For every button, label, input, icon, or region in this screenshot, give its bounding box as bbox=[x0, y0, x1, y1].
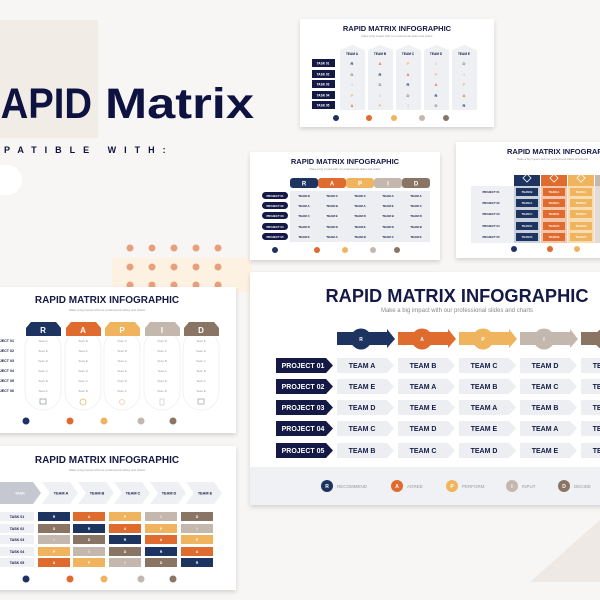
panel: slide 2 project matrix: PROJECT 03 bbox=[266, 214, 284, 218]
legend: INPUT bbox=[522, 484, 536, 489]
panel: slide 1 task matrix: D bbox=[351, 72, 354, 77]
panel: slide 2 project matrix: TEAM D bbox=[382, 225, 395, 229]
panel: slide 5 task grid: P bbox=[53, 550, 56, 554]
panel: slide 1 task matrix: TASK 05 bbox=[317, 104, 330, 108]
panel: slide 5 task grid: TASK bbox=[15, 492, 25, 496]
panel: slide 1 task matrix: RAPID MATRIX INFOGRAPHIC bbox=[343, 24, 452, 33]
panel: slide 4 RAPID columns: Team C bbox=[117, 339, 127, 343]
panel: slide 4 RAPID columns: Team E bbox=[157, 379, 167, 383]
panel: slide 4 RAPID columns: A bbox=[80, 326, 86, 335]
panel: slide 2 project matrix: TEAM A bbox=[298, 204, 311, 208]
panel: slide 2 project matrix: TEAM B bbox=[410, 225, 423, 229]
panel: slide 5 task grid: P bbox=[88, 561, 91, 565]
panel: slide 2 project matrix: TEAM D bbox=[298, 225, 311, 229]
panel: main slide: Make a big impact with our professional slides and charts bbox=[381, 308, 533, 314]
panel: main slide: TEAM C bbox=[471, 363, 497, 370]
panel: slide 1 task matrix: I bbox=[351, 82, 353, 87]
panel: slide 1 task matrix: R bbox=[463, 103, 466, 108]
panel: slide 5 task grid: R bbox=[160, 550, 163, 554]
legend: D bbox=[562, 484, 566, 490]
panel: slide 4 RAPID columns: Team B bbox=[78, 339, 88, 343]
panel: slide 3 project columns: TEAM D bbox=[576, 235, 586, 239]
panel: slide 3 project columns: TEAM A bbox=[522, 201, 532, 205]
panel: slide 5 task grid: R bbox=[88, 527, 91, 531]
panel: slide 4 RAPID columns: I bbox=[161, 326, 163, 335]
panel: slide 5 task grid: D bbox=[160, 561, 163, 565]
panel: slide 4 RAPID columns: RAPID MATRIX INFOGRAPHIC bbox=[35, 295, 179, 306]
panel: slide 1 task matrix: P bbox=[351, 93, 354, 98]
panel: slide 5 task grid: A bbox=[160, 538, 163, 542]
panel: slide 4 RAPID columns: Team D bbox=[157, 389, 167, 393]
legend bbox=[321, 480, 591, 492]
panel: slide 5 task grid: TEAM A bbox=[54, 492, 68, 496]
panel: slide 4 RAPID columns: Team B bbox=[196, 369, 206, 373]
main title: RAPID MATRIX INFOGRAPHIC bbox=[326, 286, 588, 306]
legend: RECOMMEND bbox=[337, 484, 368, 489]
panel: main slide: PROJECT 01 bbox=[282, 363, 325, 370]
panel: slide 5 task grid: TASK 03 bbox=[10, 538, 24, 542]
panel: main slide: TEAM B bbox=[471, 384, 497, 391]
panel: slide 1 task matrix: I bbox=[463, 72, 465, 77]
panel: slide 4 RAPID columns: Team A bbox=[38, 339, 48, 343]
panel: slide 1 task matrix: P bbox=[407, 61, 410, 66]
panel: main slide: TEAM C bbox=[349, 426, 375, 433]
legend: P bbox=[450, 484, 454, 490]
panel: main slide: PROJECT 02 bbox=[282, 384, 325, 391]
panel: slide 2 project matrix: TEAM E bbox=[382, 204, 394, 208]
panel: slide 2 project matrix: TEAM E bbox=[326, 214, 338, 218]
panel: main slide: TEAM A bbox=[410, 384, 436, 391]
panel: slide 1 task matrix: TEAM C bbox=[402, 52, 415, 56]
panel: slide 2 project matrix: TEAM C bbox=[382, 235, 395, 239]
panel: slide 1 task matrix: A bbox=[463, 93, 466, 98]
panel: slide 1 task matrix: TASK 03 bbox=[317, 82, 330, 86]
panel: slide 2 project matrix: TEAM E bbox=[410, 235, 422, 239]
panel: slide 1 task matrix: P bbox=[463, 82, 466, 87]
panel: slide 5 task grid: TEAM D bbox=[162, 492, 177, 496]
legend: I bbox=[511, 484, 513, 490]
panel: slide 1 task matrix: R bbox=[379, 72, 382, 77]
panel: slide 3 project columns: PROJECT 04 bbox=[482, 224, 500, 228]
panel: slide 2 project matrix: TEAM B bbox=[326, 204, 339, 208]
panel: slide 1 task matrix: A bbox=[351, 103, 354, 108]
panel: slide 1 task matrix: TEAM E bbox=[458, 52, 470, 56]
panel: slide 2 project matrix: I bbox=[387, 182, 389, 188]
panel: slide 2 project matrix: P bbox=[358, 182, 362, 188]
panel: slide 5 task grid: I bbox=[161, 515, 162, 519]
panel: slide 2 project matrix: PROJECT 01 bbox=[266, 194, 284, 198]
panel: slide 3 project columns: TEAM A bbox=[549, 190, 559, 194]
panel: slide 4 RAPID columns: Team B bbox=[78, 389, 88, 393]
panel: slide 2 project matrix: TEAM A bbox=[382, 194, 395, 198]
panel: slide 3 project columns: TEAM B bbox=[549, 235, 559, 239]
panel: slide 2 project matrix bbox=[250, 152, 440, 260]
panel: slide 3 project columns: TEAM C bbox=[576, 190, 586, 194]
panel: slide 5 task grid: R bbox=[53, 515, 56, 519]
panel: main slide: TEAM B bbox=[532, 405, 558, 412]
panel: slide 5 task grid: D bbox=[88, 538, 91, 542]
panel: slide 5 task grid: I bbox=[197, 527, 198, 531]
panel: slide 2 project matrix: TEAM E bbox=[354, 225, 366, 229]
panel: slide 2 project matrix: TEAM E bbox=[298, 235, 310, 239]
panel: slide 3 project columns: TEAM B bbox=[522, 190, 532, 194]
panel: slide 4 RAPID columns: Team A bbox=[157, 369, 167, 373]
panel: slide 1 task matrix: I bbox=[407, 103, 409, 108]
panel: slide 4 RAPID columns: Team A bbox=[196, 379, 206, 383]
panel: slide 2 project matrix: TEAM A bbox=[326, 235, 339, 239]
panel: slide 1 task matrix: A bbox=[379, 61, 382, 66]
panel: slide 2 project matrix: RAPID MATRIX INFOGRAPHIC bbox=[291, 157, 400, 166]
panel: slide 1 task matrix: TEAM B bbox=[374, 52, 387, 56]
panel: slide 4 RAPID columns: Team C bbox=[196, 359, 206, 363]
panel: slide 4 RAPID columns: Team C bbox=[78, 379, 88, 383]
team cells bbox=[337, 358, 600, 458]
panel: slide 2 project matrix: PROJECT 05 bbox=[266, 235, 284, 239]
panel: slide 4 RAPID columns: Team D bbox=[78, 369, 88, 373]
panel: slide 1 task matrix: A bbox=[407, 72, 410, 77]
panel: slide 4 RAPID columns: Team C bbox=[38, 369, 48, 373]
panel: slide 5 task grid: TASK 04 bbox=[10, 550, 24, 554]
panel: slide 5 task grid: TASK 01 bbox=[10, 515, 24, 519]
panel: slide 2 project matrix: TEAM B bbox=[354, 235, 367, 239]
panel: main slide: PROJECT 05 bbox=[282, 448, 325, 455]
panel: slide 4 RAPID columns: R bbox=[40, 326, 46, 335]
panel: main slide: TEAM A bbox=[471, 405, 497, 412]
panel: slide 5 task grid: A bbox=[196, 550, 199, 554]
panel: slide 2 project matrix: D bbox=[414, 182, 419, 188]
panel: slide 4 RAPID columns: Team B bbox=[157, 359, 167, 363]
panel: slide 5 task grid: TASK 05 bbox=[10, 561, 24, 565]
panel: slide 5 task grid: A bbox=[53, 561, 56, 565]
panel: slide 3 project columns: PROJECT 02 bbox=[482, 201, 500, 205]
panel: slide 1 task matrix: Make a big impact with our professional slides and charts bbox=[362, 34, 433, 38]
panel: slide 5 task grid: TEAM B bbox=[90, 492, 105, 496]
panel: slide 2 project matrix: R bbox=[302, 182, 307, 188]
panel: main slide: TEAM E bbox=[471, 426, 498, 433]
panel: slide 4 RAPID columns: Team C bbox=[117, 389, 127, 393]
panel: main slide: TEAM A bbox=[349, 363, 375, 370]
panel: slide 5 task grid: TEAM C bbox=[126, 492, 141, 496]
legend: R bbox=[325, 484, 329, 490]
panel: slide 5 task grid: I bbox=[54, 538, 55, 542]
panel: main slide: TEAM D bbox=[410, 426, 436, 433]
panel: slide 4 RAPID columns: Team C bbox=[157, 349, 167, 353]
header arrows: I bbox=[543, 337, 545, 343]
legend: DECIDE bbox=[574, 484, 591, 489]
panel: slide 4 RAPID columns: Team E bbox=[196, 389, 206, 393]
panel: slide 3 project columns: TEAM C bbox=[576, 212, 586, 216]
panel: slide 3 project columns bbox=[456, 142, 600, 258]
panel: slide 1 task matrix: D bbox=[435, 103, 438, 108]
panel: slide 2 project matrix: Make a big impact with our professional slides and charts bbox=[310, 167, 381, 171]
panel: main slide: TEAM E bbox=[410, 405, 437, 412]
panel: slide 4 RAPID columns: Make a big impact with our professional slides and charts bbox=[69, 308, 146, 312]
panel: slide 1 task matrix bbox=[300, 19, 494, 127]
panel: slide 5 task grid: P bbox=[160, 527, 163, 531]
panel: main slide: TEAM C bbox=[532, 384, 558, 391]
panel: slide 3 project columns: TEAM C bbox=[522, 212, 532, 216]
panel: slide 5 task grid: I bbox=[89, 550, 90, 554]
panel: slide 2 project matrix: TEAM C bbox=[354, 194, 367, 198]
panel: slide 4 RAPID columns: Team A bbox=[38, 389, 48, 393]
title bbox=[0, 80, 254, 128]
panel: slide 1 task matrix: I bbox=[379, 93, 381, 98]
project labels bbox=[276, 358, 333, 458]
panel: slide 1 task matrix: R bbox=[435, 93, 438, 98]
panel: slide 5 task grid: R bbox=[196, 561, 199, 565]
panel: slide 3 project columns: TEAM A bbox=[576, 201, 586, 205]
panel: slide 5 task grid: D bbox=[196, 515, 199, 519]
panel: main slide: TEAM B bbox=[410, 363, 436, 370]
panel: slide 4 RAPID columns: Team D bbox=[196, 349, 206, 353]
panel: slide 3 project columns: TEAM E bbox=[522, 224, 532, 228]
panel: slide 3 project columns: TEAM B bbox=[576, 224, 586, 228]
panel: slide 2 project matrix: TEAM C bbox=[298, 214, 311, 218]
panel: slide 4 RAPID columns: Team A bbox=[78, 349, 88, 353]
panel: main slide: TEAM E bbox=[349, 384, 376, 391]
panel: slide 1 task matrix: P bbox=[435, 72, 438, 77]
panel: slide 5 task grid: RAPID MATRIX INFOGRAPHIC bbox=[35, 455, 179, 466]
legend: AGREE bbox=[407, 484, 423, 489]
panel: main slide: TEAM B bbox=[349, 448, 375, 455]
panel: slide 5 task grid: A bbox=[88, 515, 91, 519]
panel: slide 5 task grid: Make a big impact with our professional slides and charts bbox=[69, 468, 146, 472]
panel: slide 1 task matrix: I bbox=[435, 61, 437, 66]
white pill bbox=[0, 165, 22, 195]
header arrows: A bbox=[420, 337, 424, 343]
panel: main slide bbox=[250, 272, 600, 505]
panel: slide 4 RAPID columns: Team D bbox=[117, 379, 127, 383]
header arrows: R bbox=[359, 337, 363, 343]
legend: PERFORM bbox=[462, 484, 485, 489]
panel: slide 4 RAPID columns: Team D bbox=[157, 339, 167, 343]
panel: slide 4 RAPID columns: Team B bbox=[117, 349, 127, 353]
header arrows bbox=[337, 328, 600, 350]
panel: slide 2 project matrix: PROJECT 04 bbox=[266, 225, 284, 229]
panel: slide 3 project columns: TEAM D bbox=[522, 235, 532, 239]
panel: slide 2 project matrix: TEAM A bbox=[354, 204, 367, 208]
panel: slide 5 task grid: R bbox=[124, 538, 127, 542]
panel: slide 1 task matrix: D bbox=[463, 61, 466, 66]
panel: slide 4 RAPID columns: Team E bbox=[38, 349, 48, 353]
legend: A bbox=[395, 484, 399, 490]
panel: slide 1 task matrix: R bbox=[351, 61, 354, 66]
panel: slide 1 task matrix: TEAM D bbox=[430, 52, 443, 56]
panel: slide 1 task matrix: TASK 02 bbox=[317, 72, 330, 76]
panel: slide 2 project matrix: TEAM C bbox=[326, 194, 339, 198]
panel: slide 5 task grid: D bbox=[53, 527, 56, 531]
panel: slide 1 task matrix: D bbox=[407, 93, 410, 98]
panel: slide 2 project matrix: TEAM A bbox=[410, 194, 423, 198]
panel: main slide: TEAM E bbox=[532, 448, 559, 455]
panel: main slide: TEAM D bbox=[471, 448, 497, 455]
dot pattern bbox=[126, 244, 222, 288]
panel: slide 3 project columns: PROJECT 03 bbox=[482, 212, 500, 216]
panel: slide 5 task grid: P bbox=[196, 538, 199, 542]
panel: slide 5 task grid: D bbox=[124, 550, 127, 554]
panel: slide 2 project matrix: TEAM D bbox=[326, 225, 339, 229]
panel: slide 5 task grid: I bbox=[125, 561, 126, 565]
panel: main slide: TEAM C bbox=[410, 448, 436, 455]
panel: slide 3 project columns: TEAM E bbox=[549, 212, 559, 216]
panel: main slide: TEAM D bbox=[532, 363, 558, 370]
panel: slide 5 task grid: A bbox=[124, 527, 127, 531]
panel: slide 5 task grid: TASK 02 bbox=[10, 527, 24, 531]
panel: slide 4 RAPID columns bbox=[0, 287, 236, 433]
panel: slide 4 RAPID columns: Team B bbox=[38, 379, 48, 383]
panel: slide 1 task matrix: TEAM A bbox=[346, 52, 359, 56]
panel: slide 3 project columns: PROJECT 01 bbox=[482, 190, 500, 194]
panel: slide 5 task grid: TEAM E bbox=[198, 492, 213, 496]
panel: slide 5 task grid: P bbox=[124, 515, 127, 519]
panel: slide 2 project matrix: PROJECT 02 bbox=[266, 204, 284, 208]
panel: slide 2 project matrix: TEAM B bbox=[298, 194, 311, 198]
panel: slide 3 project columns: TEAM C bbox=[549, 201, 559, 205]
panel: main slide: TEAM D bbox=[349, 405, 375, 412]
panel: slide 1 task matrix: TASK 04 bbox=[317, 94, 330, 98]
panel: slide 2 project matrix: TEAM B bbox=[382, 214, 395, 218]
panel: slide 2 project matrix: TEAM D bbox=[354, 214, 367, 218]
panel: slide 2 project matrix: TEAM D bbox=[410, 214, 423, 218]
title: Matrix bbox=[105, 80, 254, 128]
panel: slide 2 project matrix: A bbox=[330, 182, 335, 188]
panel: slide 4 RAPID columns: Team E bbox=[196, 339, 206, 343]
panel: slide 3 project columns: PROJECT 05 bbox=[482, 235, 500, 239]
panel: slide 4 RAPID columns: Team D bbox=[38, 359, 48, 363]
panel: slide 4 RAPID columns: Team A bbox=[117, 359, 127, 363]
panel: slide 2 project matrix: TEAM C bbox=[410, 204, 423, 208]
panel: slide 3 project columns: TEAM D bbox=[549, 224, 559, 228]
panel: main slide: TEAM A bbox=[532, 426, 558, 433]
panel: slide 3 project columns: Make a big impact with our professional slides and charts bbox=[517, 157, 588, 161]
panel: slide 4 RAPID columns: Team E bbox=[117, 369, 127, 373]
panel: slide 1 task matrix: D bbox=[379, 82, 382, 87]
panel: slide 1 task matrix: TASK 01 bbox=[317, 62, 330, 66]
panel: slide 5 task grid bbox=[0, 446, 236, 590]
panel: slide 4 RAPID columns: P bbox=[119, 326, 125, 335]
panel: slide 4 RAPID columns: Team E bbox=[78, 359, 88, 363]
panel: slide 1 task matrix: P bbox=[379, 103, 382, 108]
panel: slide 1 task matrix: R bbox=[407, 82, 410, 87]
panel: slide 4 RAPID columns: D bbox=[198, 326, 204, 335]
panel: main slide: PROJECT 03 bbox=[282, 405, 325, 412]
panel: main slide: PROJECT 04 bbox=[282, 426, 325, 433]
panel: slide 1 task matrix: A bbox=[435, 82, 438, 87]
header arrows: P bbox=[481, 337, 485, 343]
